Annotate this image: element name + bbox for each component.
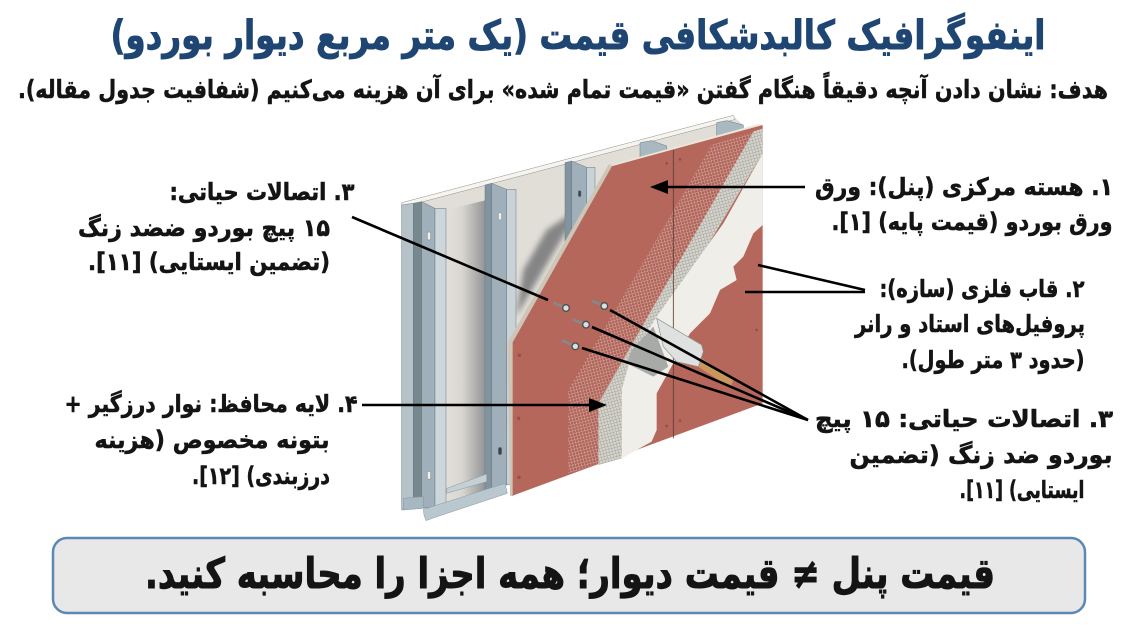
screws — [553, 301, 608, 350]
label 3 right: fasteners: ایستایی) [۱۱]. — [960, 476, 1084, 504]
leader: left fasteners — [352, 217, 548, 300]
arrow: protective layer — [362, 398, 607, 412]
stud 4 and stud 5 — [640, 121, 743, 160]
label 1: core panel: ۱. هسته مرکزی (پنل): ورق — [815, 173, 1113, 201]
label 2: metal frame: (حدود ۳ متر طول). — [902, 346, 1084, 374]
label 3 right: fasteners — [815, 405, 1113, 504]
label 2: metal frame: ۲. قاب فلزی (سازه): — [880, 275, 1085, 303]
grey mesh band — [598, 128, 763, 465]
arrows: metal frame — [745, 265, 865, 292]
label 2: metal frame: پروفیل‌های استاد و رانر — [854, 310, 1085, 338]
panel top edge — [610, 124, 763, 166]
stud 3 — [565, 161, 595, 250]
label 2: metal frame — [854, 275, 1085, 374]
red panel — [508, 125, 763, 496]
white joint compound — [622, 153, 763, 458]
back board — [402, 115, 743, 510]
label 4: protective layer: بتونه مخصوص (هزینه — [94, 426, 330, 454]
label 3 left: fasteners: ۳. اتصالات حیاتی: — [170, 178, 355, 206]
panel edge — [508, 164, 613, 496]
bottom track — [403, 474, 507, 521]
mesh band on panel — [568, 132, 753, 473]
label 3 left: fasteners: ۱۵ پیچ بوردو ضضد زنگ — [78, 214, 330, 242]
arrow: core panel — [650, 180, 805, 194]
stud 2 — [485, 183, 516, 490]
panel screw dots — [517, 158, 758, 479]
label 4: protective layer — [64, 390, 358, 490]
trowel — [657, 318, 733, 388]
compound shading — [627, 327, 668, 377]
panel seam — [672, 150, 675, 438]
label 1: core panel — [815, 173, 1113, 236]
label 4: protective layer: ۴. لایه محافظ: نوار درزگیر + — [64, 390, 358, 418]
label 3 left: fasteners — [78, 178, 355, 276]
label 3 right: fasteners: بوردو ضد زنگ (تضمین — [850, 441, 1112, 469]
label 4: protective layer: درزبندی) [۱۲]. — [192, 462, 330, 490]
stud 1 — [402, 202, 446, 510]
label 3 left: fasteners: (تضمین ایستایی) [۱۱]. — [88, 248, 330, 276]
leaders: right fasteners — [582, 310, 808, 420]
label 3 right: fasteners: ۳. اتصالات حیاتی: ۱۵ پیچ — [815, 405, 1113, 433]
callout: bottom message — [53, 538, 1085, 613]
illustration: drywall cross-section — [402, 115, 763, 521]
